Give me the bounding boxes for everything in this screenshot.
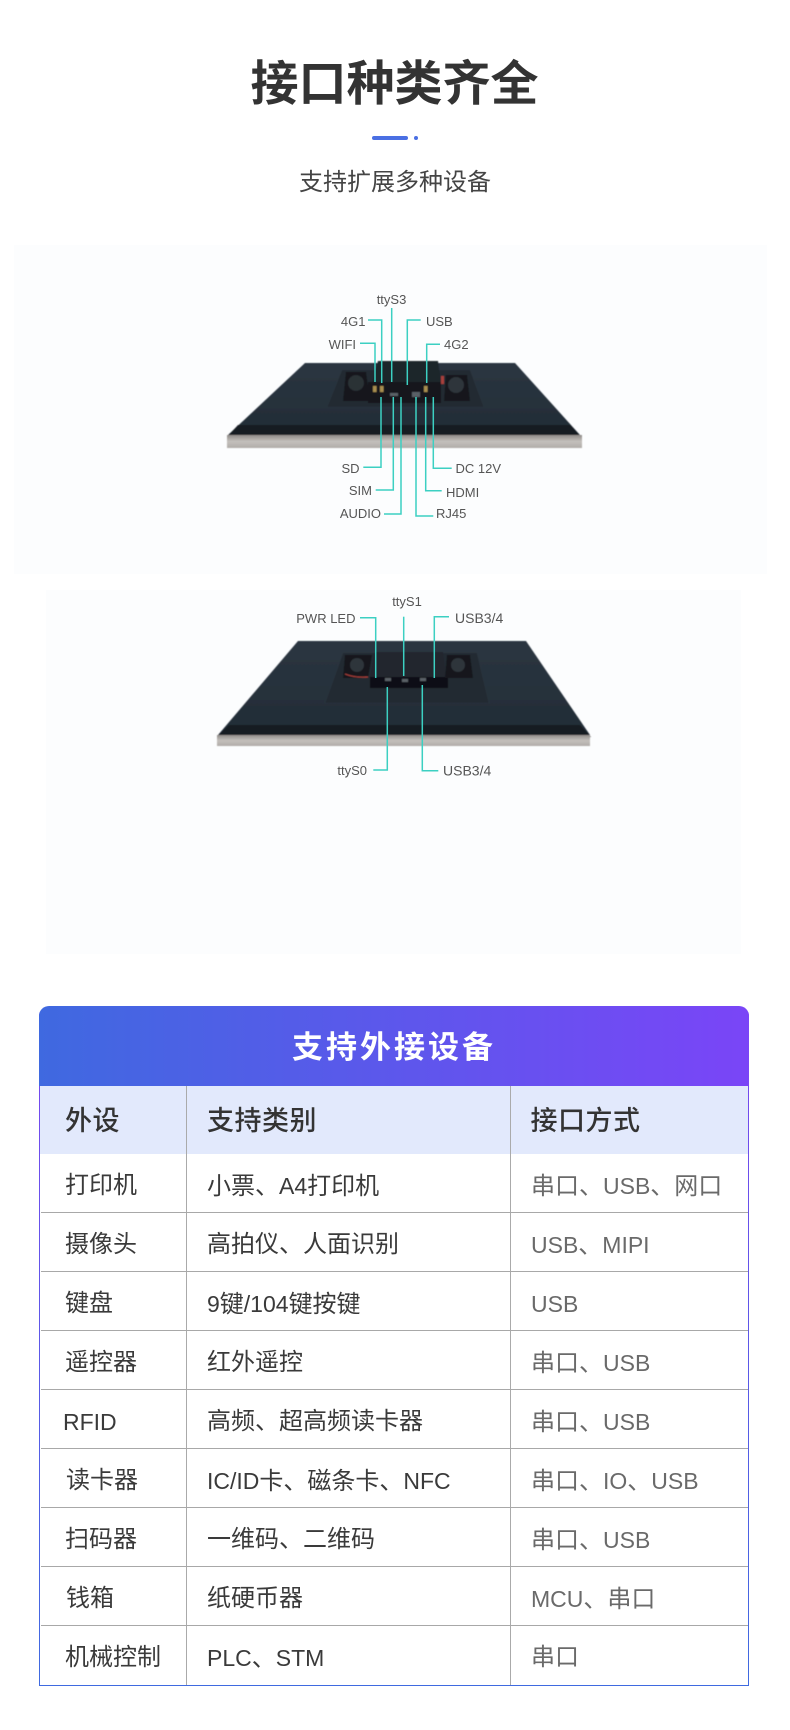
table row: RFID <box>41 1390 748 1449</box>
title accent bar <box>372 136 418 140</box>
callouts A <box>360 308 452 516</box>
port labels B: USB3/4 <box>443 762 491 778</box>
monitor A <box>227 361 582 448</box>
port labels B: PWR LED <box>296 611 356 626</box>
panel: rear view with side B ports <box>46 590 741 954</box>
table row: remote control: 串口、USB <box>531 1350 650 1377</box>
port labels A: DC 12V <box>456 461 501 476</box>
table row: camera: USB、MIPI <box>531 1232 650 1259</box>
port labels A: SIM <box>349 483 372 498</box>
port labels B: USB3/4 <box>455 610 503 626</box>
table row: machine control: 机械控制 <box>65 1644 161 1671</box>
port labels A: SD <box>341 461 360 476</box>
table row: remote control <box>41 1331 748 1390</box>
table row: cash drawer: 纸硬币器 <box>207 1585 303 1612</box>
table heading banner: 支持外接设备 <box>292 1030 496 1065</box>
table row: card reader: 串口、IO、USB <box>531 1468 699 1495</box>
table row: card reader <box>41 1449 748 1508</box>
table row: remote control: 红外遥控 <box>207 1349 303 1376</box>
column dividers <box>186 1086 187 1685</box>
table left and right border <box>39 1012 749 1686</box>
table row: machine control: 串口 <box>531 1644 579 1671</box>
panel: rear view with side A ports <box>14 245 767 574</box>
table row: cash drawer <box>41 1567 748 1626</box>
column headers: 接口方式 <box>530 1106 640 1136</box>
table row: camera: 摄像头 <box>65 1231 137 1258</box>
port labels A: WIFI <box>329 337 356 352</box>
monitor B <box>217 641 591 746</box>
table row: printer: 打印机 <box>65 1172 137 1199</box>
subtitle: 支持扩展多种设备 <box>299 169 491 196</box>
port labels A: ttyS3 <box>377 292 406 307</box>
table row: scanner: 扫码器 <box>65 1526 137 1553</box>
table row: scanner <box>41 1508 748 1567</box>
diagram: monitor rear ports and labels <box>216 292 592 778</box>
port labels A: AUDIO <box>340 506 381 521</box>
column headers: 外设 <box>65 1106 120 1136</box>
table row: camera <box>41 1213 748 1272</box>
port labels A: RJ45 <box>436 506 466 521</box>
table row: machine control <box>65 1644 579 1672</box>
table row: keyboard: USB <box>531 1291 578 1317</box>
table row: scanner: 串口、USB <box>531 1527 650 1554</box>
port labels A: HDMI <box>446 485 479 500</box>
table heading banner <box>39 1006 749 1086</box>
column headers <box>40 1086 748 1154</box>
table row: machine control: PLC、STM <box>207 1645 324 1672</box>
port labels A: 4G1 <box>341 314 366 329</box>
table row: cash drawer: MCU、串口 <box>531 1586 655 1613</box>
table row: RFID: 高频、超高频读卡器 <box>207 1408 423 1435</box>
port labels B <box>296 594 503 778</box>
table row: printer: 小票、A4打印机 <box>207 1173 379 1200</box>
column dividers <box>510 1086 511 1685</box>
table row: keyboard <box>41 1272 748 1331</box>
table row: camera: 高拍仪、人面识别 <box>207 1231 399 1258</box>
port labels B: ttyS0 <box>337 763 367 778</box>
title: 接口种类齐全 <box>250 58 538 111</box>
table row: scanner: 一维码、二维码 <box>207 1526 375 1553</box>
port labels A: USB <box>426 314 453 329</box>
table row: keyboard: 9键/104键按键 <box>207 1291 361 1318</box>
table row: RFID: RFID <box>63 1409 117 1435</box>
port labels A: 4G2 <box>444 337 469 352</box>
callouts B <box>360 617 449 771</box>
table row: printer <box>41 1154 748 1213</box>
port labels B: ttyS1 <box>392 594 422 609</box>
port labels A <box>329 292 501 521</box>
table row: card reader: 读卡器 <box>66 1467 138 1494</box>
table row: remote control: 遥控器 <box>65 1349 137 1376</box>
table row: RFID: 串口、USB <box>531 1409 650 1436</box>
panel: supported peripherals table <box>39 1006 749 1686</box>
table row: card reader: IC/ID卡、磁条卡、NFC <box>207 1468 451 1495</box>
table row: printer: 串口、USB、网口 <box>531 1173 722 1200</box>
table row: keyboard: 键盘 <box>65 1290 113 1317</box>
column headers: 支持类别 <box>207 1106 317 1136</box>
table row: cash drawer: 钱箱 <box>66 1585 114 1612</box>
